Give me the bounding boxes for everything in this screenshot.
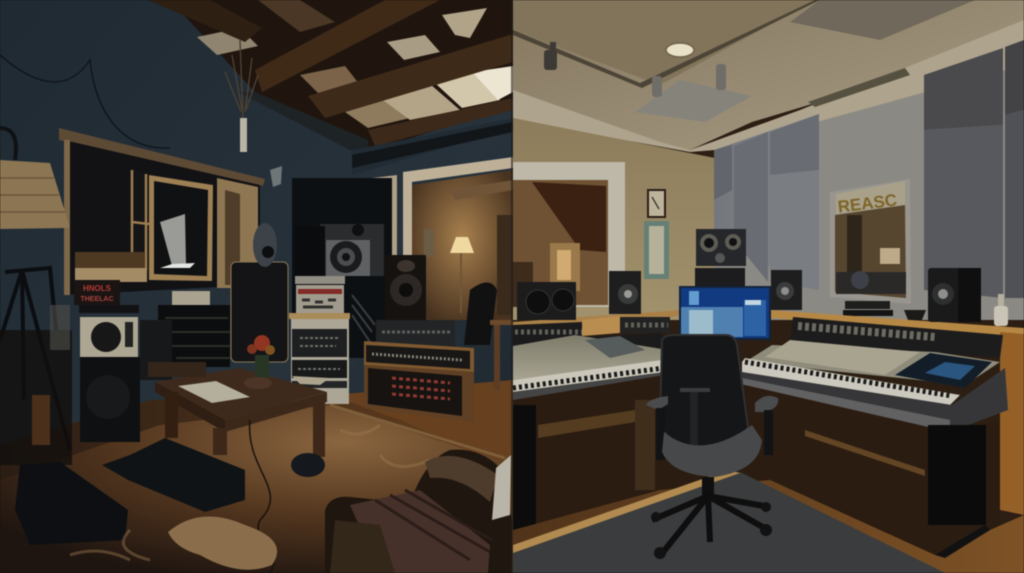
- wall cables: [0, 55, 170, 148]
- track spotlights: [544, 42, 726, 97]
- air vent: [808, 68, 910, 107]
- wall mirror with sign: [830, 179, 911, 316]
- left mixing console: [513, 317, 680, 408]
- black acoustic panel: [292, 178, 392, 358]
- chair back: [660, 335, 748, 450]
- stacked receivers: [364, 320, 474, 422]
- touch control panel: [895, 353, 992, 388]
- office chair: [646, 335, 778, 559]
- red sign: HNOLS: [83, 284, 112, 293]
- keyboard: [742, 358, 960, 405]
- grey carpet: [513, 472, 945, 573]
- grey wall: [715, 65, 1024, 320]
- doorway to back room: [403, 157, 513, 320]
- wooden floor: [513, 480, 1024, 573]
- round pouch: [291, 453, 325, 477]
- recessed light: [666, 43, 694, 57]
- woven armchair: [325, 450, 512, 573]
- brown stool: [148, 362, 206, 377]
- right mixing console: [742, 317, 1008, 432]
- ceiling: [513, 0, 1024, 152]
- large wall speaker: [295, 224, 384, 276]
- soap bottle and bowl: [904, 294, 1008, 326]
- dividing seam: [511, 0, 513, 573]
- floor lamp: [450, 237, 474, 313]
- floor cushions: [15, 438, 277, 570]
- tripod stand: [0, 268, 70, 450]
- framed certificate: [644, 221, 669, 279]
- guitar amp: [79, 305, 140, 442]
- wooden coffee table: [155, 335, 330, 457]
- under-desk woodwork: [513, 375, 1000, 555]
- dark shelves and rack: [140, 305, 230, 380]
- wall mirror with sign: REASC: [837, 190, 898, 217]
- hanging dried plant and tube: [225, 40, 258, 152]
- panel: home studio (left): [0, 0, 513, 573]
- open book: [178, 381, 250, 403]
- flowers vase: [247, 335, 275, 383]
- rug: [0, 405, 505, 573]
- red sign: [74, 280, 120, 305]
- standing lamp shade: [0, 128, 70, 229]
- computer display: [679, 286, 771, 340]
- panel: professional studio (right): [513, 0, 1024, 573]
- grey globe speaker: [253, 223, 277, 267]
- seat: [662, 425, 762, 477]
- wall clock: [647, 189, 666, 218]
- black tall speaker panel: [231, 262, 288, 362]
- rug pattern shading: [70, 425, 430, 560]
- black floor speaker: [385, 255, 426, 320]
- chair base: [652, 496, 770, 556]
- far-right monitor: [928, 268, 981, 322]
- vintage rack unit: [295, 276, 345, 314]
- chair in doorway: [464, 282, 497, 345]
- interior window: [59, 128, 265, 295]
- ceiling: exposed wooden beams: [78, 0, 513, 175]
- equipment rack tower: [289, 313, 350, 404]
- desk top shelf: [513, 310, 1024, 515]
- wall sensor: [270, 166, 282, 187]
- right monitor: [771, 270, 802, 310]
- cables on floor: [250, 420, 274, 573]
- left monitor pair: [517, 271, 641, 320]
- control room window: [513, 162, 625, 307]
- stool and guitar clutter: [0, 330, 72, 465]
- stairs rail: [352, 295, 375, 345]
- floor: [0, 395, 513, 573]
- centre speaker: [695, 229, 746, 286]
- beige wall: [513, 118, 715, 320]
- acoustic panels: [714, 40, 1024, 298]
- red sign: THEELAC: [80, 296, 114, 303]
- armrests: [646, 396, 778, 412]
